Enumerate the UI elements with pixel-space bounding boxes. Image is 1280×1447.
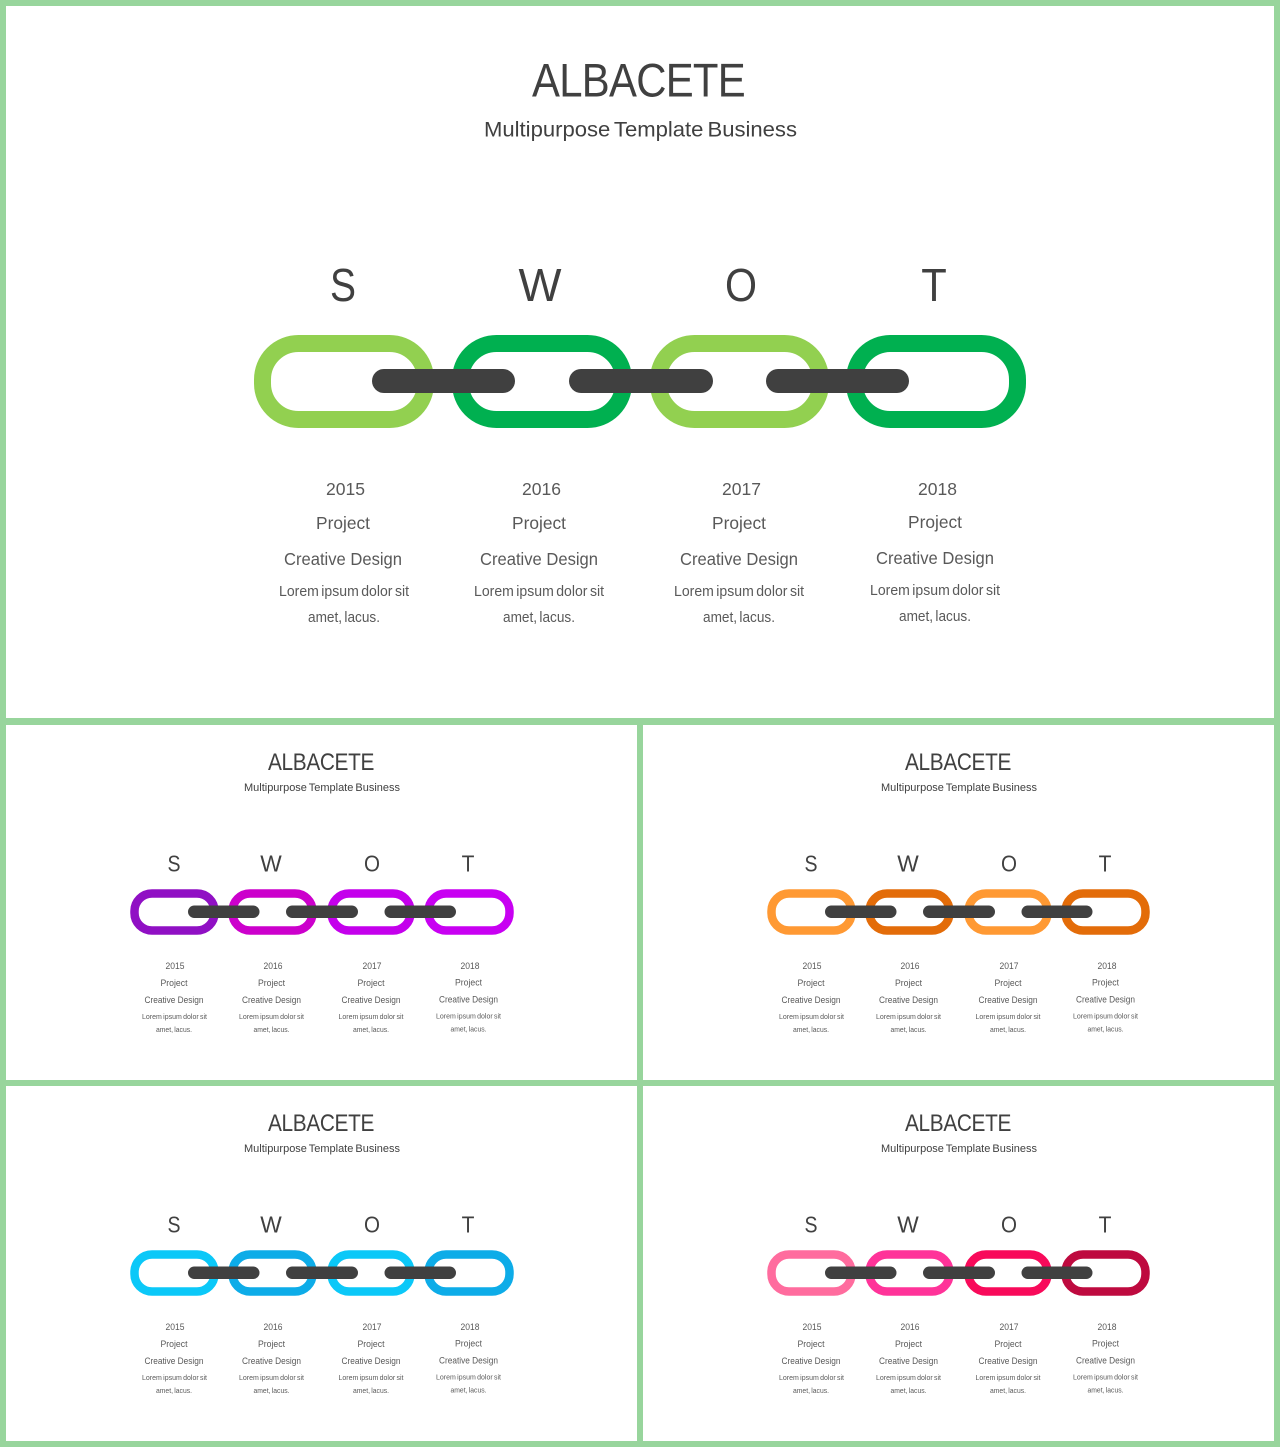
column: 2017: Creative Design	[978, 1356, 1038, 1366]
column: 2018	[870, 479, 1000, 625]
column: 2016: Project	[895, 978, 922, 988]
column: 2015: amet, lacus.	[793, 1386, 829, 1395]
SWOT letters: T	[462, 850, 474, 876]
column: 2016: Creative Design	[480, 549, 598, 569]
column: 2017: Lorem ipsum dolor sit	[674, 584, 804, 600]
SWOT letters: W	[897, 1212, 919, 1238]
column: 2017: Creative Design	[680, 549, 798, 569]
chain graphic	[134, 894, 510, 930]
column: 2018: Lorem ipsum dolor sit	[870, 583, 1000, 599]
SWOT letters: W	[897, 850, 919, 876]
column: 2017: Creative Design	[342, 1356, 400, 1366]
column: 2015	[279, 479, 409, 626]
SWOT letters: W	[518, 259, 562, 311]
column: 2018: Creative Design	[439, 994, 498, 1004]
chain graphic	[262, 344, 1018, 420]
column: 2018: Lorem ipsum dolor sit	[1073, 1012, 1138, 1020]
subtitle: Multipurpose Template Business	[881, 782, 1037, 794]
column: 2017: Creative Design	[978, 995, 1038, 1005]
column: 2017: amet, lacus.	[703, 610, 775, 626]
subtitle: Multipurpose Template Business	[484, 118, 797, 142]
column: 2016: Project	[512, 513, 566, 533]
column: 2016: 2016	[264, 961, 282, 971]
column: 2018	[436, 1322, 501, 1394]
column: 2017	[338, 1322, 404, 1395]
column: 2015: 2015	[166, 1322, 184, 1332]
column: 2018: Creative Design	[1076, 994, 1135, 1004]
column: 2016: Lorem ipsum dolor sit	[876, 1012, 941, 1021]
column: 2018: 2018	[918, 479, 957, 499]
panel: blue SWOT slide	[6, 1086, 637, 1441]
column: 2017: Project	[358, 978, 385, 988]
column: 2017: 2017	[722, 479, 761, 499]
column: 2015: amet, lacus.	[156, 1386, 192, 1395]
column: 2018: 2018	[1098, 1322, 1116, 1332]
column: 2017: amet, lacus.	[353, 1386, 389, 1395]
column: 2015	[779, 961, 844, 1034]
column: 2015	[142, 961, 207, 1034]
column: 2016: Creative Design	[879, 995, 938, 1005]
panel: pink SWOT slide	[643, 1086, 1274, 1441]
SWOT letters	[168, 1212, 474, 1238]
column: 2017	[976, 1322, 1041, 1395]
column: 2018: Creative Design	[1076, 1356, 1135, 1366]
column: 2015: Creative Design	[144, 995, 204, 1005]
chain graphic	[772, 894, 1146, 930]
column: 2015: Creative Design	[144, 1356, 204, 1366]
column: 2016	[474, 479, 604, 626]
column: 2018: amet, lacus.	[450, 1386, 486, 1394]
SWOT letters: S	[804, 850, 818, 876]
column: 2017: 2017	[1000, 961, 1018, 971]
column: 2016: Lorem ipsum dolor sit	[239, 1012, 304, 1021]
column: 2016: Lorem ipsum dolor sit	[239, 1373, 304, 1382]
SWOT letters	[804, 850, 1111, 876]
column: 2015: Project	[160, 978, 188, 988]
column: 2018: Project	[1092, 1338, 1119, 1348]
SWOT letters: O	[1001, 1212, 1017, 1238]
column: 2015: Creative Design	[782, 995, 840, 1005]
column: 2018: 2018	[460, 961, 480, 971]
column: 2015	[142, 1322, 207, 1395]
column: 2016: Lorem ipsum dolor sit	[474, 584, 604, 600]
column: 2016: Lorem ipsum dolor sit	[876, 1373, 941, 1382]
column: 2016: amet, lacus.	[254, 1025, 290, 1034]
SWOT letters: S	[168, 1212, 180, 1238]
column: 2017: Project	[994, 978, 1022, 988]
column: 2018: Lorem ipsum dolor sit	[436, 1012, 501, 1020]
column: 2015: Lorem ipsum dolor sit	[142, 1373, 207, 1382]
column: 2015: Project	[160, 1339, 188, 1349]
panel: main green SWOT slide	[6, 6, 1274, 718]
column: 2018: amet, lacus.	[899, 609, 971, 625]
column: 2018: 2018	[460, 1322, 480, 1332]
column: 2018: Project	[908, 512, 962, 532]
column: 2018	[1073, 1322, 1138, 1394]
column: 2016: amet, lacus.	[503, 610, 575, 626]
SWOT letters: O	[1001, 850, 1017, 876]
column: 2017	[338, 961, 404, 1034]
column: 2016: 2016	[264, 1322, 282, 1332]
column: 2015: Project	[798, 1339, 825, 1349]
column: 2017: Lorem ipsum dolor sit	[338, 1012, 404, 1021]
column: 2017	[976, 961, 1041, 1034]
title: ALBACETE	[905, 749, 1011, 776]
SWOT letters: T	[462, 1212, 474, 1238]
column: 2015: amet, lacus.	[793, 1025, 829, 1034]
column: 2015: Lorem ipsum dolor sit	[779, 1012, 844, 1021]
SWOT letters: T	[921, 259, 947, 311]
column: 2015: Lorem ipsum dolor sit	[142, 1012, 207, 1021]
column: 2016	[239, 961, 304, 1034]
column: 2018: Creative Design	[439, 1356, 498, 1366]
chain graphic	[772, 1254, 1146, 1292]
column: 2015: amet, lacus.	[308, 610, 380, 626]
column: 2015: 2015	[802, 1322, 822, 1332]
column: 2016: Creative Design	[242, 995, 301, 1005]
column: 2017: Project	[712, 513, 766, 533]
column: 2016: Project	[895, 1339, 922, 1349]
column: 2017: Project	[994, 1339, 1022, 1349]
subtitle: Multipurpose Template Business	[244, 1143, 400, 1155]
column: 2016	[239, 1322, 304, 1395]
column: 2018	[1073, 961, 1138, 1034]
column: 2017: Creative Design	[342, 995, 400, 1005]
title: ALBACETE	[532, 54, 745, 106]
SWOT letters: W	[260, 1212, 282, 1238]
column: 2015: Creative Design	[284, 549, 402, 569]
column: 2017: 2017	[362, 961, 382, 971]
column: 2018: 2018	[1098, 961, 1116, 971]
SWOT letters	[168, 850, 474, 876]
column: 2017: 2017	[362, 1322, 382, 1332]
column: 2015: Creative Design	[782, 1356, 840, 1366]
subtitle: Multipurpose Template Business	[881, 1143, 1037, 1155]
column: 2018: Lorem ipsum dolor sit	[1073, 1372, 1138, 1382]
SWOT letters: S	[168, 850, 180, 876]
column: 2016: amet, lacus.	[890, 1025, 926, 1034]
column: 2016: 2016	[522, 479, 561, 499]
column: 2015: Project	[798, 978, 825, 988]
column: 2018	[436, 961, 501, 1034]
column: 2016: Project	[258, 978, 285, 988]
SWOT letters: O	[364, 850, 380, 876]
subtitle: Multipurpose Template Business	[244, 782, 400, 794]
column: 2018: Creative Design	[876, 548, 994, 568]
column: 2017: amet, lacus.	[990, 1386, 1026, 1395]
column: 2017: Lorem ipsum dolor sit	[976, 1012, 1041, 1021]
SWOT letters	[330, 259, 947, 311]
column: 2018: amet, lacus.	[450, 1024, 486, 1034]
title: ALBACETE	[268, 749, 374, 776]
column: 2015: amet, lacus.	[156, 1025, 192, 1034]
column: 2018: Project	[1092, 978, 1119, 988]
column: 2018: amet, lacus.	[1088, 1024, 1124, 1034]
chain graphic	[134, 1254, 510, 1292]
column: 2016	[876, 1322, 941, 1395]
column: 2015: 2015	[166, 961, 184, 971]
column: 2016: 2016	[900, 1322, 920, 1332]
column: 2015	[779, 1322, 844, 1395]
column: 2017: amet, lacus.	[353, 1025, 389, 1034]
title: ALBACETE	[905, 1110, 1011, 1137]
column: 2017	[674, 479, 804, 626]
column: 2017: amet, lacus.	[990, 1025, 1026, 1034]
SWOT letters	[804, 1212, 1111, 1238]
SWOT letters: O	[364, 1212, 380, 1238]
SWOT letters: W	[260, 850, 282, 876]
column: 2015: Lorem ipsum dolor sit	[779, 1373, 844, 1382]
column: 2017: Lorem ipsum dolor sit	[976, 1373, 1041, 1382]
panel: purple SWOT slide	[6, 725, 637, 1080]
column: 2017: Project	[358, 1339, 385, 1349]
column: 2015: 2015	[802, 961, 822, 971]
column: 2015: 2015	[326, 479, 365, 499]
SWOT letters: T	[1099, 850, 1111, 876]
column: 2016: amet, lacus.	[254, 1386, 290, 1395]
column: 2016: Project	[258, 1339, 285, 1349]
column: 2018: Lorem ipsum dolor sit	[436, 1372, 501, 1382]
column: 2017: 2017	[1000, 1322, 1018, 1332]
panel: orange SWOT slide	[643, 725, 1274, 1080]
column: 2015: Project	[316, 513, 370, 533]
column: 2015: Lorem ipsum dolor sit	[279, 584, 409, 600]
column: 2016: Creative Design	[879, 1356, 938, 1366]
column: 2018: Project	[455, 978, 482, 988]
column: 2017: Lorem ipsum dolor sit	[338, 1373, 404, 1382]
column: 2018: amet, lacus.	[1088, 1386, 1124, 1394]
SWOT letters: S	[804, 1212, 818, 1238]
SWOT letters: T	[1099, 1212, 1111, 1238]
title: ALBACETE	[268, 1110, 374, 1137]
column: 2016: amet, lacus.	[890, 1386, 926, 1395]
SWOT letters: S	[330, 259, 356, 311]
SWOT letters: O	[725, 259, 757, 311]
column: 2016: 2016	[900, 961, 920, 971]
column: 2016	[876, 961, 941, 1034]
column: 2018: Project	[455, 1338, 482, 1348]
column: 2016: Creative Design	[242, 1356, 301, 1366]
